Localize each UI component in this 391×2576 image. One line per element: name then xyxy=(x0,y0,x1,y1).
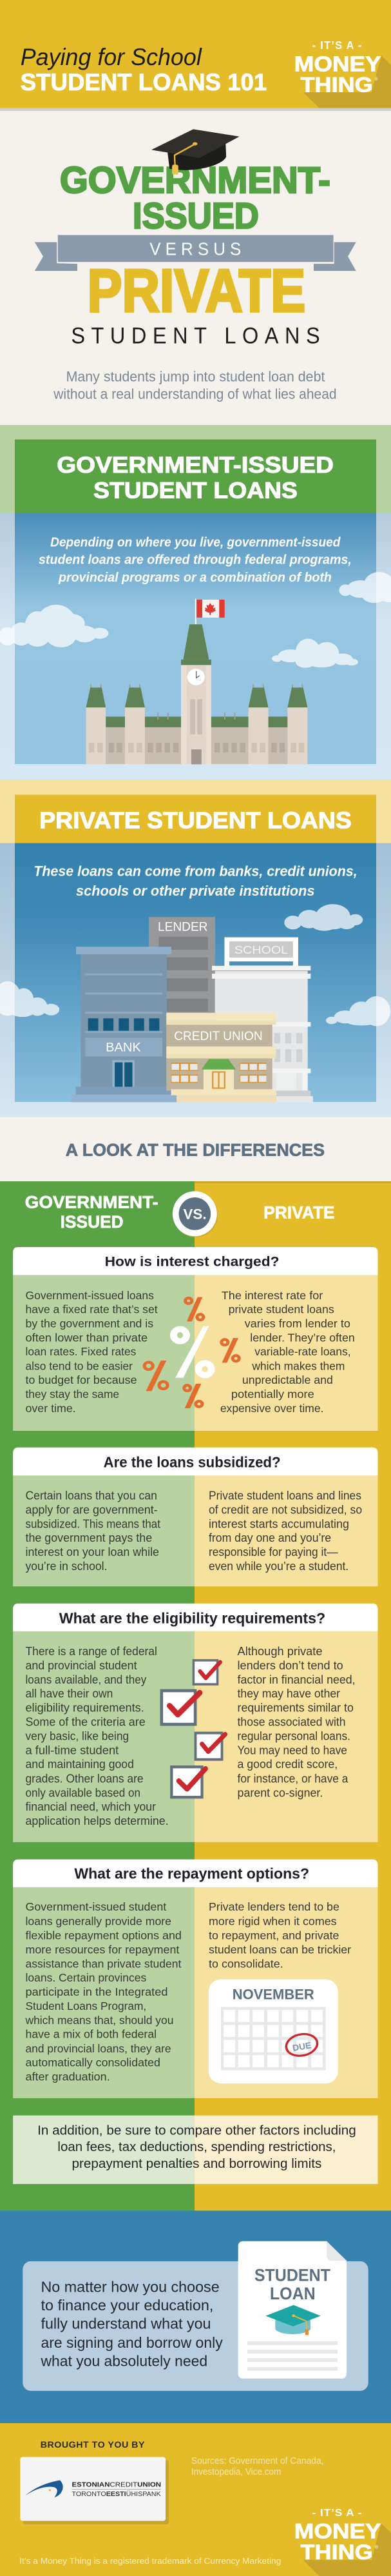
sponsor logo card: ESTONIANCREDITUNION xyxy=(72,2481,161,2488)
logo: It's a Money Thing xyxy=(294,39,381,97)
private text: parent co-signer. xyxy=(238,1785,323,1799)
private text: requirements similar to xyxy=(238,1700,354,1714)
private text: to consolidate. xyxy=(209,1957,283,1970)
clouds xyxy=(0,904,390,1026)
private text: unpredictable and xyxy=(242,1373,333,1387)
logo: It's a Money Thing: THING xyxy=(300,72,373,97)
panel: private student loans xyxy=(0,780,391,1117)
closing text: fully understand what you xyxy=(41,2315,211,2332)
heading: government-issued xyxy=(60,159,330,236)
government text xyxy=(25,1900,182,2083)
brought to you by: BROUGHT TO YOU BY xyxy=(41,2439,145,2450)
card: eligibility requirements: What are the eligibility requirements? xyxy=(59,1609,325,1627)
government text: loans available, and they xyxy=(25,1673,147,1686)
ribbon: versus xyxy=(35,235,356,271)
government text: Some of the criteria are xyxy=(25,1715,146,1729)
heading xyxy=(57,453,334,503)
government text: There is a range of federal xyxy=(25,1644,157,1658)
private text: private student loans xyxy=(229,1303,334,1316)
government text: apply for are government- xyxy=(25,1502,158,1517)
government text xyxy=(25,1289,158,1415)
private text: interest starts accumulating xyxy=(209,1517,349,1530)
description text xyxy=(33,863,358,899)
sources xyxy=(191,2456,323,2477)
heading: government-issued: ISSUED xyxy=(133,196,259,236)
description text: provincial programs or a combination of both xyxy=(58,571,332,585)
government text: loans generally provide more xyxy=(25,1914,171,1927)
intro text: Many students jump into student loan debt xyxy=(66,369,325,385)
government text: and provincial loans, they are xyxy=(25,2042,171,2055)
government text: eligibility requirements. xyxy=(25,1700,144,1714)
government text xyxy=(25,1644,169,1827)
private text: variable-rate loans, xyxy=(254,1345,351,1359)
government text: have a fixed rate that’s set xyxy=(25,1303,158,1316)
government text: interest on your loan while xyxy=(25,1545,159,1558)
private text: responsible for paying it— xyxy=(209,1545,338,1558)
private text: lenders don’t tend to xyxy=(238,1658,343,1672)
private text: they may have other xyxy=(238,1686,340,1700)
government text: grades. Other loans are xyxy=(25,1771,144,1785)
card: eligibility requirements xyxy=(13,1604,377,1842)
government text: and maintaining good xyxy=(25,1757,134,1771)
closing text: No matter how you choose xyxy=(41,2279,220,2296)
column heading: government-issued xyxy=(25,1193,158,1232)
heading: private: PRIVATE xyxy=(87,258,305,325)
private text xyxy=(209,1488,362,1573)
government text: automatically consolidated xyxy=(25,2056,160,2069)
government text: over time. xyxy=(25,1402,76,1415)
badge: vs xyxy=(173,1191,218,1237)
header title: STUDENT LOANS 101 xyxy=(21,69,267,95)
government text: participate in the Integrated xyxy=(25,1985,168,1998)
callout: other factors: loan fees, tax deductions, spending restrictions, xyxy=(57,2139,336,2154)
building: lender xyxy=(149,917,215,1014)
government text: all have their own xyxy=(25,1686,113,1700)
building: credit union: CREDIT UNION xyxy=(174,1030,263,1043)
logo: It's a Money Thing: MONEY xyxy=(294,2520,381,2543)
private text: varies from lender to xyxy=(245,1317,350,1330)
panel: hero title xyxy=(35,129,356,402)
intro text xyxy=(53,369,337,402)
heading: GOVERNMENT-ISSUED xyxy=(57,453,334,478)
panel: government-issued student loans xyxy=(0,425,391,780)
trademark note: It’s a Money Thing is a registered trademark of Currency Marketing xyxy=(19,2556,281,2566)
card: repayment options: What are the repayment options? xyxy=(74,1865,309,1882)
private text: to repayment, and private xyxy=(209,1929,339,1942)
column heading: private: PRIVATE xyxy=(263,1203,335,1223)
description text: student loans are offered through federal programs, xyxy=(39,553,352,567)
private text xyxy=(209,1900,351,1970)
government text: Government-issued student xyxy=(25,1900,167,1913)
column heading: government-issued: GOVERNMENT- xyxy=(25,1193,158,1212)
private text: regular personal loans. xyxy=(238,1729,350,1743)
card: are the loans subsidized xyxy=(13,1448,377,1586)
government text: and provincial student xyxy=(25,1658,137,1672)
icon: student loan document xyxy=(238,2241,347,2379)
government text: also tend to be easier xyxy=(25,1360,133,1373)
icon: checkboxes xyxy=(162,1660,225,1797)
government text: loans. Certain provinces xyxy=(25,1971,146,1984)
sponsor logo card: TORONTOEESTIÜHISPANK xyxy=(72,2490,161,2498)
header title xyxy=(21,44,267,95)
panel: closing message xyxy=(0,2210,391,2423)
government text: more resources for repayment xyxy=(25,1943,180,1956)
description text xyxy=(39,535,352,585)
callout: other factors: prepayment penalties and borrowing limits xyxy=(72,2156,322,2171)
private text: Although private xyxy=(238,1644,323,1658)
private text: more rigid when it comes xyxy=(209,1914,337,1927)
panel: header band xyxy=(0,0,391,111)
card: are the loans subsidized: Are the loans subsidized? xyxy=(104,1453,281,1471)
logo: It's a Money Thing: MONEY xyxy=(294,52,381,76)
column heading: government-issued: ISSUED xyxy=(61,1213,124,1232)
sponsor logo card xyxy=(20,2457,169,2524)
government text: flexible repayment options and xyxy=(25,1929,182,1942)
government text: which means that, should you xyxy=(25,2014,173,2027)
card: how is interest charged: How is interest charged? xyxy=(105,1254,280,1269)
private text: expensive over time. xyxy=(220,1402,323,1415)
illustration: parliament building xyxy=(86,599,307,764)
card: repayment options xyxy=(13,1860,377,2098)
government text: loan rates. Fixed rates xyxy=(25,1345,137,1359)
government text: Certain loans that you can xyxy=(25,1488,157,1502)
private text xyxy=(238,1644,356,1799)
government text: assistance than private student xyxy=(25,1957,182,1970)
private text xyxy=(220,1289,355,1415)
private text: those associated with xyxy=(238,1715,346,1729)
building: lender: LENDER xyxy=(158,920,207,934)
building: school: SCHOOL xyxy=(234,943,288,956)
private text: of credit are not subsidized, so xyxy=(209,1502,362,1517)
building: school xyxy=(212,938,313,1102)
government text: to budget for because xyxy=(25,1373,137,1387)
government text: have a mix of both federal xyxy=(25,2027,157,2041)
callout: other factors: In addition, be sure to compare other factors including xyxy=(37,2123,356,2138)
card: how is interest charged xyxy=(13,1247,377,1431)
government text: Student Loans Program, xyxy=(25,2000,146,2012)
closing text xyxy=(41,2279,224,2370)
private text: potentially more xyxy=(231,1388,314,1401)
badge: vs: VS. xyxy=(184,1206,207,1223)
private text: student loans can be trickier xyxy=(209,1943,351,1956)
government text: they stay the same xyxy=(25,1388,119,1401)
building: bank xyxy=(71,947,176,1102)
building: bank: BANK xyxy=(106,1041,141,1055)
government text: often lower than private xyxy=(25,1332,148,1344)
private text: factor in financial need, xyxy=(238,1673,356,1686)
header title: Paying for School xyxy=(21,44,202,70)
government text: subsidized. This means that xyxy=(25,1517,160,1530)
icon: student loan document: LOAN xyxy=(270,2284,316,2303)
government text: application helps determine. xyxy=(25,1814,169,1827)
intro text: without a real understanding of what lies ahead xyxy=(53,387,337,402)
private text: lender. They’re often xyxy=(250,1332,355,1344)
logo: It's a Money Thing: - IT’S A - xyxy=(312,39,361,52)
heading: government-issued: GOVERNMENT- xyxy=(60,159,330,201)
closing text: to finance your education, xyxy=(41,2297,213,2314)
government text xyxy=(25,1488,160,1573)
icon: calendar: NOVEMBER xyxy=(233,1986,314,2002)
government text: very basic, like being xyxy=(25,1729,129,1743)
icon: graduation cap xyxy=(151,129,240,175)
government text: only available based on xyxy=(25,1785,140,1799)
icon: calendar xyxy=(209,1980,338,2083)
heading: PRIVATE STUDENT LOANS xyxy=(39,808,352,834)
heading: STUDENT LOANS xyxy=(93,478,298,503)
speech bubble xyxy=(23,2261,368,2391)
logo: It's a Money Thing: ® xyxy=(374,76,378,82)
private text: Private lenders tend to be xyxy=(209,1900,339,1913)
heading: a look at the differences: A LOOK AT THE DIFFERENCES xyxy=(66,1141,325,1160)
private text: which makes them xyxy=(251,1360,345,1373)
logo: It's a Money Thing xyxy=(294,2507,381,2564)
government text: by the government and is xyxy=(25,1317,153,1330)
private text: You may need to have xyxy=(238,1743,347,1756)
private text: The interest rate for xyxy=(222,1289,323,1303)
clouds xyxy=(0,572,391,668)
description text: Depending on where you live, government-issued xyxy=(50,535,341,549)
private text: from day one and you’re xyxy=(209,1531,331,1544)
description text: These loans can come from banks, credit unions, xyxy=(33,863,358,879)
government text: after graduation. xyxy=(25,2070,110,2083)
callout: other factors xyxy=(13,2116,377,2184)
government text: the government pays the xyxy=(25,1531,152,1544)
icon: calendar: DUE xyxy=(292,2040,312,2053)
closing text: are signing and borrow only xyxy=(41,2334,224,2352)
icon: percent signs xyxy=(144,1297,239,1408)
logo: It's a Money Thing: - IT’S A - xyxy=(312,2507,361,2519)
government text: Government-issued loans xyxy=(25,1289,154,1303)
government text: financial need, which your xyxy=(25,1800,156,1813)
logo: It's a Money Thing: ® xyxy=(374,2544,379,2550)
private text: for instance, or have a xyxy=(238,1771,348,1785)
government text: you’re in school. xyxy=(25,1559,107,1573)
private text: even while you’re a student. xyxy=(209,1559,348,1573)
private text: Private student loans and lines xyxy=(209,1488,361,1502)
government text: a full-time student xyxy=(25,1743,119,1756)
ribbon: versus: VERSUS xyxy=(149,239,241,259)
closing text: what you absolutely need xyxy=(41,2353,207,2370)
logo: It's a Money Thing: THING xyxy=(300,2541,373,2564)
icon: student loan document: STUDENT xyxy=(254,2265,330,2285)
panel: comparison xyxy=(0,1181,391,2211)
panel: footer xyxy=(0,2423,391,2576)
sources: Investopedia, Vice.com xyxy=(191,2467,281,2477)
description text: schools or other private institutions xyxy=(76,883,315,899)
heading: student loans: STUDENT LOANS xyxy=(71,323,320,349)
private text: a good credit score, xyxy=(238,1757,338,1771)
sources: Sources: Government of Canada, xyxy=(191,2456,323,2466)
building: credit union xyxy=(166,1013,276,1102)
